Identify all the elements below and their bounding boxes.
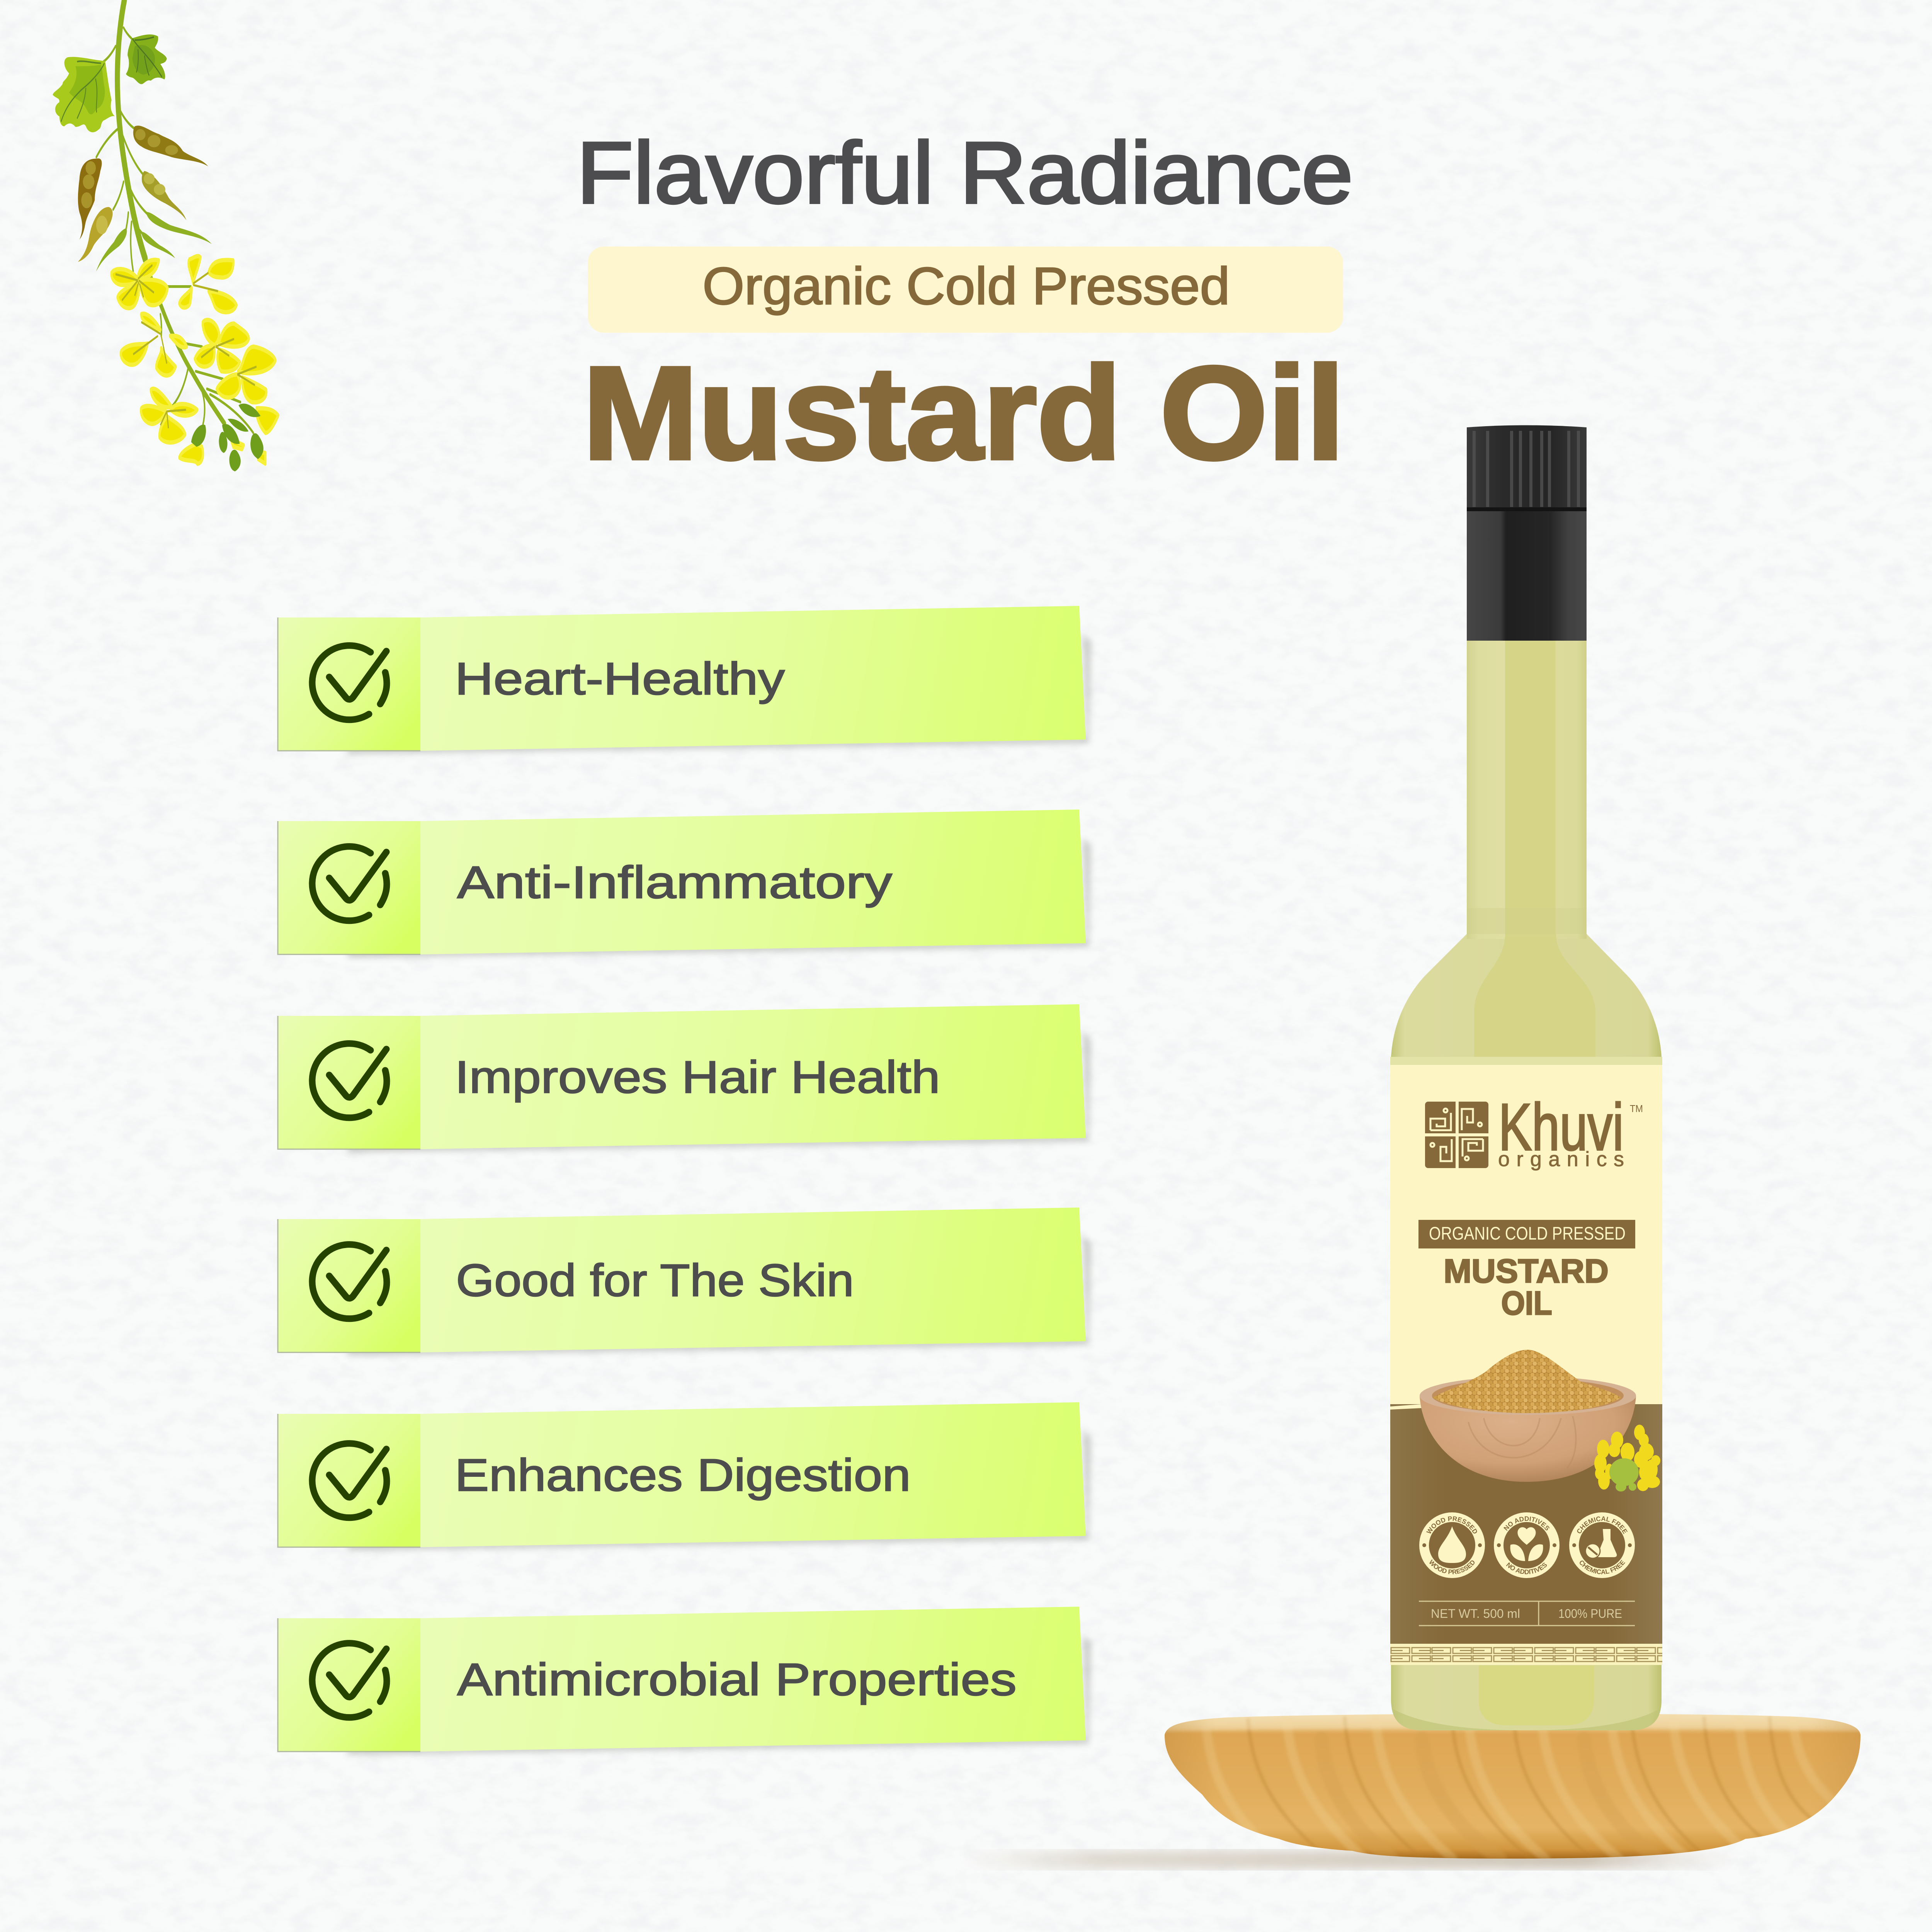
label product name [1444, 1253, 1609, 1322]
benefit: Good for The Skin: Good for The Skin [456, 1255, 854, 1306]
badge: chemical free: CHEMICAL FREE [1575, 1515, 1629, 1535]
benefit: Antimicrobial Properties [278, 1607, 1091, 1755]
label band: ORGANIC COLD PRESSED [1429, 1223, 1626, 1243]
net weight and purity row [1419, 1601, 1635, 1626]
platform shadow [958, 1851, 1743, 1869]
stems [96, 0, 253, 433]
subtitle: Organic Cold Pressed: Organic Cold Pressed [702, 257, 1230, 315]
net weight and purity row: NET WT. 500 ml [1431, 1607, 1520, 1621]
benefit: Improves Hair Health: Improves Hair Health [455, 1052, 940, 1103]
title: Flavorful Radiance: Flavorful Radiance [577, 124, 1353, 221]
badge: chemical free [1569, 1512, 1635, 1578]
heading: Mustard Oil: Mustard Oil [583, 339, 1345, 487]
badge: no additives: NO ADDITIVES [1505, 1561, 1549, 1576]
bottle cap [1467, 425, 1587, 641]
net weight and purity row: 100% PURE [1558, 1607, 1622, 1621]
yellow flowers [111, 256, 278, 464]
small right leaf [126, 34, 167, 84]
benefit: Enhances Digestion: Enhances Digestion [455, 1450, 911, 1501]
badge: chemical free: CHEMICAL FREE [1578, 1559, 1626, 1576]
benefit: Heart-Healthy: Heart-Healthy [455, 653, 785, 704]
brand sub-name: organics [1498, 1148, 1624, 1171]
benefit: Antimicrobial Properties: Antimicrobial Properties [457, 1654, 1017, 1705]
bottle glass [1387, 638, 1665, 1735]
badge: wood pressed: WOOD PRESSED [1427, 1558, 1477, 1576]
subtitle pill [588, 247, 1343, 333]
badge: wood pressed: WOOD PRESSED [1425, 1515, 1479, 1535]
wooden bowl with mustard seeds [1420, 1350, 1636, 1482]
benefit: Enhances Digestion [278, 1402, 1091, 1551]
meander border strip [1390, 1644, 1662, 1665]
brand name: Khuvi [1498, 1090, 1624, 1164]
badge: no additives: NO ADDITIVES [1502, 1515, 1551, 1532]
label product name: OIL [1501, 1285, 1552, 1322]
trademark: TM [1630, 1103, 1643, 1114]
product label [1390, 1065, 1662, 1665]
seed pods [78, 126, 212, 272]
badge: wood pressed [1419, 1512, 1485, 1578]
product: mustard oil bottle [1387, 425, 1665, 1735]
illustration: mustard plant sprig [53, 0, 278, 471]
benefit: Good for The Skin [278, 1208, 1091, 1356]
benefit: Improves Hair Health [278, 1004, 1091, 1153]
benefit: Anti-Inflammatory [278, 810, 1091, 958]
brand logo mark [1425, 1102, 1488, 1168]
label band highlight [1390, 1057, 1662, 1065]
mustard flower cluster [1594, 1425, 1660, 1492]
label band [1418, 1220, 1635, 1248]
wooden platform [1159, 1712, 1866, 1866]
flower buds [191, 404, 264, 471]
flower stamens [116, 265, 257, 428]
benefit: Anti-Inflammatory: Anti-Inflammatory [457, 857, 892, 908]
label product name: MUSTARD [1444, 1253, 1609, 1290]
benefit: Heart-Healthy [278, 606, 1091, 754]
badge: no additives [1494, 1512, 1560, 1578]
large left leaf [53, 57, 115, 132]
